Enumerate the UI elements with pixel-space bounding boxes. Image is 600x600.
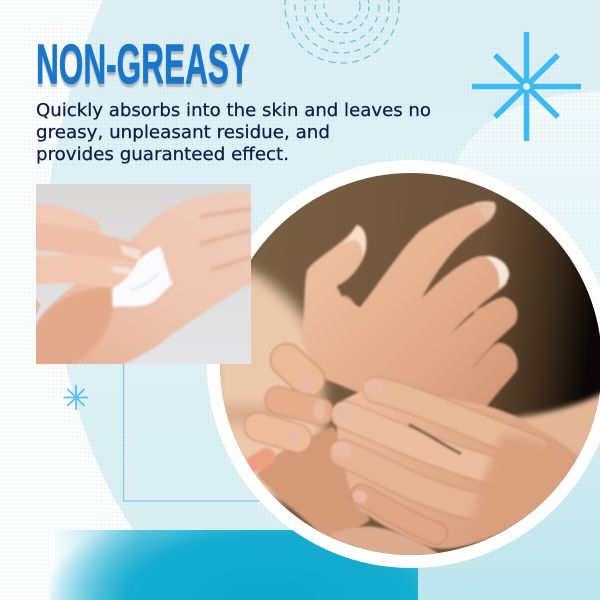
forearm and back of hand [35, 191, 252, 365]
forearm [257, 427, 370, 540]
decorative outlined square [124, 364, 262, 501]
photo: applying cream on hand [35, 184, 252, 365]
applying fingers [35, 215, 133, 275]
body text: provides guaranteed effect. [36, 144, 289, 165]
title: NON-GREASY [36, 32, 250, 96]
title: NON-GREASY [36, 36, 250, 100]
cream [112, 247, 173, 307]
right hand [337, 383, 578, 549]
upper hand [301, 201, 518, 427]
left hand fingers [255, 360, 320, 463]
photo: hands massage in circle [210, 170, 600, 570]
body text [36, 100, 431, 165]
icon: small star [64, 385, 88, 410]
body text: Quickly absorbs into the skin and leaves no [36, 100, 431, 121]
white circle ring [207, 160, 600, 568]
blurred beige background [210, 262, 330, 500]
bottom gradient band [50, 530, 418, 600]
body text: greasy, unpleasant residue, and [36, 122, 330, 143]
icon: dashed concentric circles [285, 0, 399, 63]
fingernails [286, 373, 385, 505]
nails [473, 201, 496, 219]
icon: large star [472, 32, 581, 141]
title [36, 32, 250, 100]
